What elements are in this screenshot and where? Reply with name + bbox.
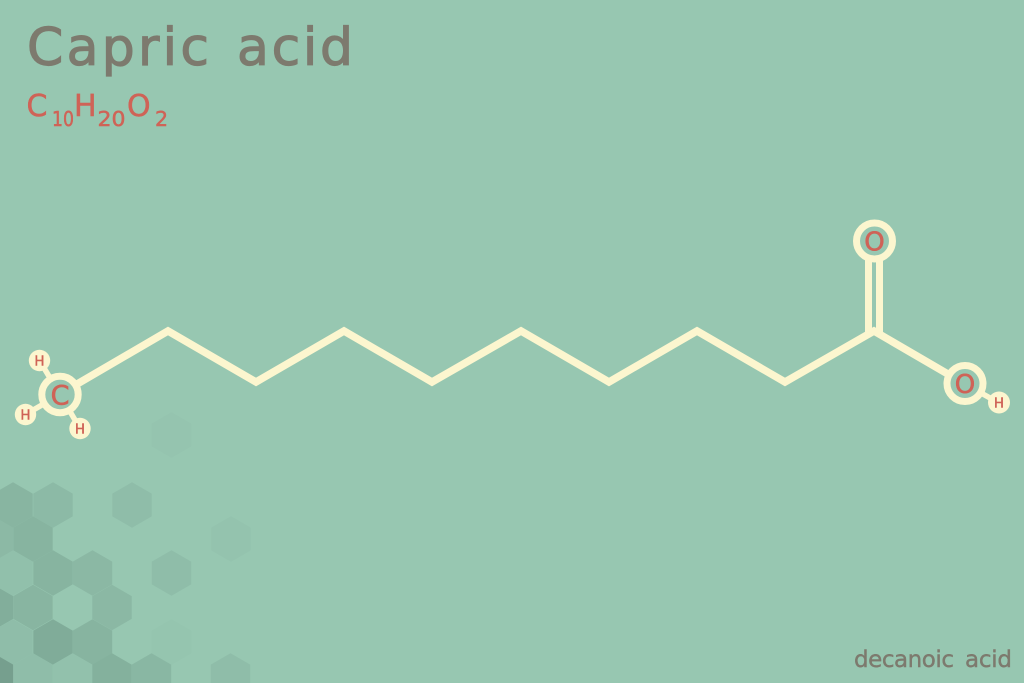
chemical formula: 10 (52, 107, 74, 131)
alternate name: acid (965, 647, 1012, 673)
hydrogen atom top: H (34, 354, 45, 370)
hydrogen atom bottom: H (75, 422, 85, 438)
hydroxyl hydrogen atom: H (994, 396, 1004, 412)
carbonyl oxygen atom: O (864, 228, 885, 258)
title (27, 18, 353, 78)
title: acid (237, 18, 353, 78)
chemical formula: O (127, 89, 151, 124)
chemical formula: 2 (155, 107, 168, 131)
alternate name (854, 647, 1012, 673)
hydrogen bonds (26, 360, 80, 428)
double bond (868, 250, 880, 334)
carbon atom: C (51, 380, 69, 412)
carbonyl oxygen atom (856, 223, 892, 259)
carbon chain (60, 331, 965, 394)
hexagon pattern (0, 412, 251, 683)
alternate name: decanoic (854, 647, 954, 673)
hydroxyl group (947, 366, 1010, 414)
chemical formula: C (26, 89, 47, 124)
O-H bond (965, 384, 999, 403)
chemical formula: H (74, 89, 97, 124)
title: Capric (27, 18, 209, 78)
hydrogen atom left: H (20, 408, 31, 424)
methyl group (15, 350, 91, 439)
hydroxyl oxygen atom: O (955, 370, 975, 400)
chemical formula (26, 89, 168, 131)
chemical formula: 20 (98, 107, 126, 131)
